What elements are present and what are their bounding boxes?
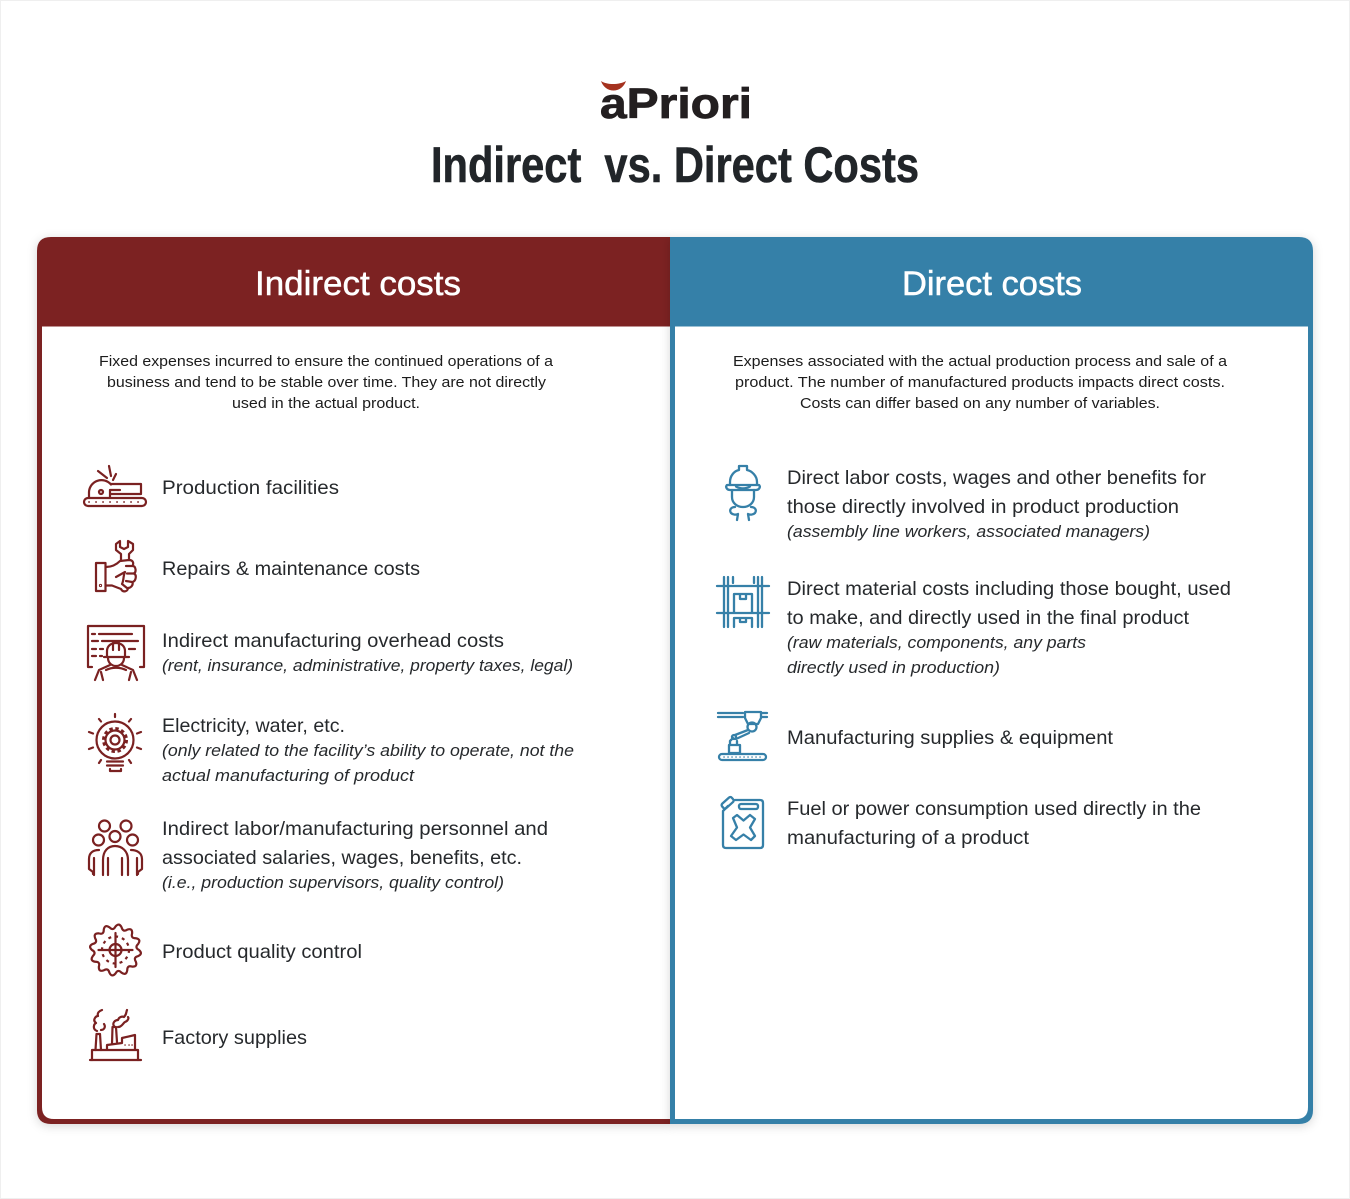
- direct description: [733, 354, 1228, 412]
- icon: factory with smoke: [90, 1010, 141, 1060]
- item: electricity and water: [162, 715, 574, 785]
- item: direct labor: those directly involved in product production: [787, 496, 1179, 518]
- item: factory supplies: Factory supplies: [162, 1027, 307, 1049]
- direct description: Costs can differ based on any number of variables.: [800, 396, 1160, 412]
- indirect panel frame: [37, 237, 670, 1124]
- item: indirect labor: [162, 818, 548, 892]
- icon: light bulb with gear: [89, 714, 141, 771]
- icon: group of people: [89, 820, 142, 875]
- direct panel body: [675, 326, 1308, 1119]
- item: direct material: directly used in production): [787, 658, 1000, 677]
- logo: aPriori: aPriori: [600, 80, 752, 128]
- indirect description: used in the actual product.: [232, 396, 420, 412]
- item: direct labor: Direct labor costs, wages and other benefits for: [787, 467, 1207, 489]
- indirect description: [99, 354, 554, 412]
- item: direct material: [787, 578, 1231, 677]
- item: repairs and maintenance: Repairs & maintenance costs: [162, 558, 420, 580]
- icon: production facility: [84, 466, 146, 506]
- item: direct labor: (assembly line workers, associated managers): [787, 522, 1150, 541]
- icon: hand with wrench: [96, 541, 136, 591]
- panel: direct costs: [670, 237, 1313, 1124]
- panel: indirect costs: [37, 237, 670, 1124]
- item: electricity and water: actual manufacturing of product: [162, 766, 415, 785]
- icon: quality gear target: [90, 925, 141, 975]
- direct heading: Direct costs: [902, 265, 1082, 303]
- indirect heading: Indirect costs: [255, 265, 461, 303]
- item: product quality control: Product quality control: [162, 941, 362, 963]
- item: indirect labor: Indirect labor/manufacturing personnel and: [162, 818, 548, 840]
- item: fuel or power: manufacturing of a product: [787, 827, 1030, 849]
- item: indirect overhead: (rent, insurance, administrative, property taxes, legal): [162, 656, 573, 675]
- icon: material rack with boxes: [717, 577, 769, 627]
- icon: worker with hard hat: [726, 466, 760, 520]
- item: indirect labor: associated salaries, wages, benefits, etc.: [162, 847, 522, 869]
- indirect description: business and tend to be stable over time. They are not directly: [107, 375, 547, 391]
- icon: robot arm on conveyor: [718, 712, 767, 760]
- item: direct material: to make, and directly used in the final product: [787, 607, 1190, 629]
- item: direct material: Direct material costs including those bought, used: [787, 578, 1231, 600]
- icon: fuel jerry can: [721, 796, 763, 848]
- icon: worker at overhead screen: [88, 626, 144, 680]
- item: indirect overhead: Indirect manufacturing overhead costs: [162, 630, 504, 652]
- item: fuel or power: Fuel or power consumption used directly in the: [787, 798, 1201, 820]
- direct description: Expenses associated with the actual production process and sale of a: [733, 354, 1228, 370]
- item: manufacturing supplies: Manufacturing supplies & equipment: [787, 727, 1114, 749]
- direct description: product. The number of manufactured products impacts direct costs.: [735, 375, 1225, 391]
- item: direct labor: [787, 467, 1207, 541]
- item: indirect overhead: [162, 630, 573, 675]
- item: direct material: (raw materials, components, any parts: [787, 633, 1087, 652]
- direct panel frame: [670, 237, 1313, 1124]
- indirect description: Fixed expenses incurred to ensure the continued operations of a: [99, 354, 554, 370]
- item: indirect labor: (i.e., production supervisors, quality control): [162, 873, 504, 892]
- title: Indirect vs. Direct Costs: [431, 137, 919, 193]
- item: electricity and water: Electricity, water, etc.: [162, 715, 345, 737]
- item: production facilities: Production facilities: [162, 477, 339, 499]
- item: electricity and water: (only related to the facility’s ability to operate, not the: [162, 741, 574, 760]
- indirect panel body: [42, 326, 670, 1119]
- item: fuel or power: [787, 798, 1201, 849]
